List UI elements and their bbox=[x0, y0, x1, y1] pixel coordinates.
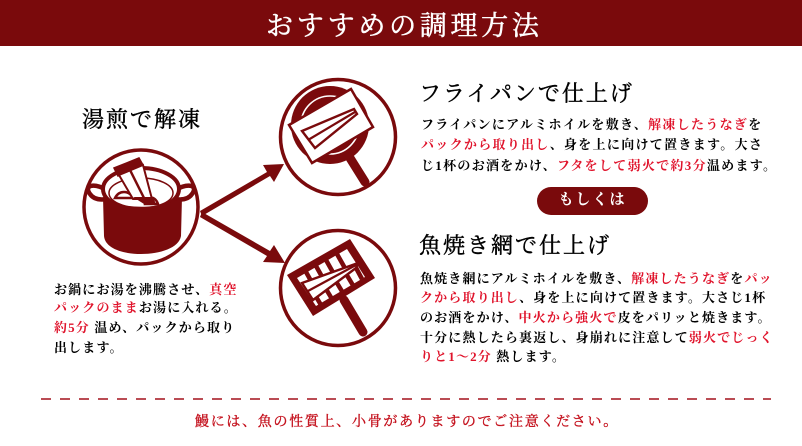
text block: fish grill: のお酒をかけ、中火から強火で皮をパリッと焼きます。 bbox=[420, 310, 772, 325]
heading: finish in frying pan: フライパンで仕上げ bbox=[419, 81, 634, 106]
heading: finish on fish grill: 魚焼き網で仕上げ bbox=[419, 233, 611, 258]
text block: frying pan: じ1杯のお酒をかけ、フタをして弱火で約3分温めます。 bbox=[421, 158, 777, 173]
text block: hot water thawing: 出します。 bbox=[54, 340, 124, 355]
text block: frying pan: パックから取り出し、身を上に向けて置きます。大さ bbox=[421, 137, 763, 152]
text block: hot water thawing: 約5分 温め、パックから取り bbox=[54, 320, 235, 335]
icon: fish grill net bbox=[280, 230, 396, 346]
text block: fish grill: りと1～2分 熱します。 bbox=[420, 349, 566, 364]
arrow: to grill bbox=[200, 212, 285, 263]
pill: or bbox=[537, 187, 648, 215]
text block: hot water thawing bbox=[54, 282, 238, 355]
arrow: to frying pan bbox=[200, 164, 284, 216]
footer note: 鰻には、魚の性質上、小骨がありますのでご注意ください。 bbox=[195, 415, 619, 430]
header band bbox=[0, 0, 802, 46]
text block: frying pan: フライパンにアルミホイルを敷き、解凍したうなぎを bbox=[421, 117, 763, 132]
text block: hot water thawing: パックのままお湯に入れる。 bbox=[54, 300, 238, 315]
text block: hot water thawing: お鍋にお湯を沸騰させ、真空 bbox=[54, 282, 238, 297]
title: おすすめの調理方法 bbox=[266, 11, 543, 41]
text block: fish grill: 十分に熱したら裏返し、身崩れに注意して弱火でじっく bbox=[420, 330, 774, 345]
icon: frying pan bbox=[280, 80, 396, 194]
heading: hot water thawing: 湯煎で解凍 bbox=[82, 107, 202, 132]
text block: fish grill: クから取り出し、身を上に向けて置きます。大さじ1杯 bbox=[420, 290, 766, 305]
text block: fish grill bbox=[420, 271, 774, 364]
icon: pot bbox=[84, 150, 198, 264]
pill: or: もしくは bbox=[558, 192, 626, 208]
text block: frying pan bbox=[421, 117, 777, 173]
text block: fish grill: 魚焼き網にアルミホイルを敷き、解凍したうなぎをパッ bbox=[420, 271, 773, 286]
